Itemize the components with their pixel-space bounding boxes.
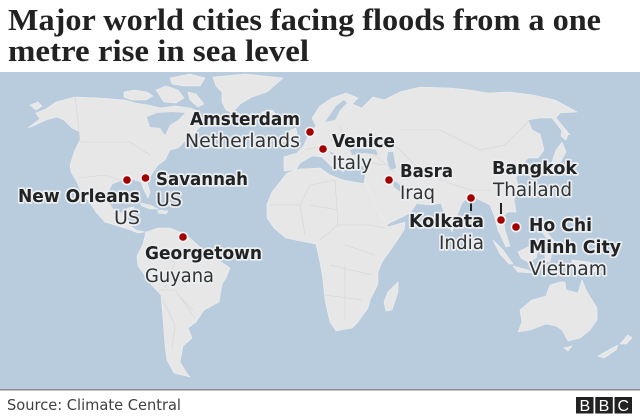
label: Bangkok: Bangkok — [492, 159, 577, 179]
leader line: Kolkata — [470, 203, 472, 211]
label: Basra — [400, 162, 453, 204]
leader line: Bangkok — [500, 203, 502, 214]
label: Basra: Basra — [400, 162, 453, 182]
BBC logo: B — [599, 398, 609, 415]
land: Australia — [518, 280, 597, 341]
title — [8, 2, 601, 68]
label: Georgetown: Guyana — [145, 266, 214, 287]
land: Canadian Arctic islands — [30, 74, 205, 110]
map baseline — [0, 389, 640, 390]
label: Amsterdam — [185, 110, 300, 152]
land: Madagascar — [384, 282, 398, 311]
label: Georgetown — [145, 244, 262, 287]
land: South America — [137, 228, 230, 377]
label: Kolkata: Kolkata — [409, 212, 484, 232]
label: New Orleans: New Orleans — [18, 187, 140, 207]
BBC logo — [576, 397, 632, 415]
label: Amsterdam: Amsterdam — [190, 110, 300, 130]
label: Savannah — [156, 170, 248, 211]
BBC logo: B — [579, 398, 590, 415]
land: Caribbean — [140, 203, 168, 214]
BBC logo: C — [618, 398, 629, 415]
label: Savannah: Savannah — [156, 170, 248, 190]
label: Savannah: US — [156, 190, 182, 211]
label: Venice — [332, 132, 395, 174]
label: Amsterdam: Netherlands — [185, 131, 300, 152]
map panel — [0, 72, 640, 389]
city markers — [122, 127, 521, 242]
land: UK, Iceland, Japan — [261, 110, 568, 172]
source: Source: Climate Central — [7, 396, 181, 414]
label: Basra: Iraq — [400, 183, 435, 204]
label: Kolkata: India — [439, 233, 484, 254]
label: Ho Chi Minh City: Minh City — [529, 238, 622, 258]
label: Bangkok: Thailand — [492, 180, 572, 201]
title: Major world cities facing floods from a one — [8, 2, 601, 37]
land: Africa — [267, 168, 405, 331]
label: Georgetown: Georgetown — [145, 244, 262, 264]
title: metre rise in sea level — [8, 33, 309, 68]
label: New Orleans: US — [114, 208, 140, 229]
land: Tasmania and New Zealand — [564, 335, 632, 358]
label: Ho Chi Minh City — [529, 216, 622, 280]
label: Ho Chi Minh City: Ho Chi — [529, 216, 592, 236]
label: Venice: Italy — [332, 153, 372, 174]
label: Bangkok — [492, 159, 577, 201]
country borders — [75, 97, 530, 190]
label: Kolkata — [409, 212, 484, 254]
land: Greenland — [213, 74, 283, 113]
label: Ho Chi Minh City: Vietnam — [529, 259, 607, 280]
water: inland seas — [325, 100, 406, 193]
label: Venice: Venice — [332, 132, 395, 152]
land: South-East Asia islands — [493, 222, 602, 273]
land: Eurasia — [284, 87, 577, 247]
label: New Orleans — [18, 187, 140, 229]
water: Hudson Bay — [147, 112, 185, 135]
land: North America — [28, 97, 205, 233]
